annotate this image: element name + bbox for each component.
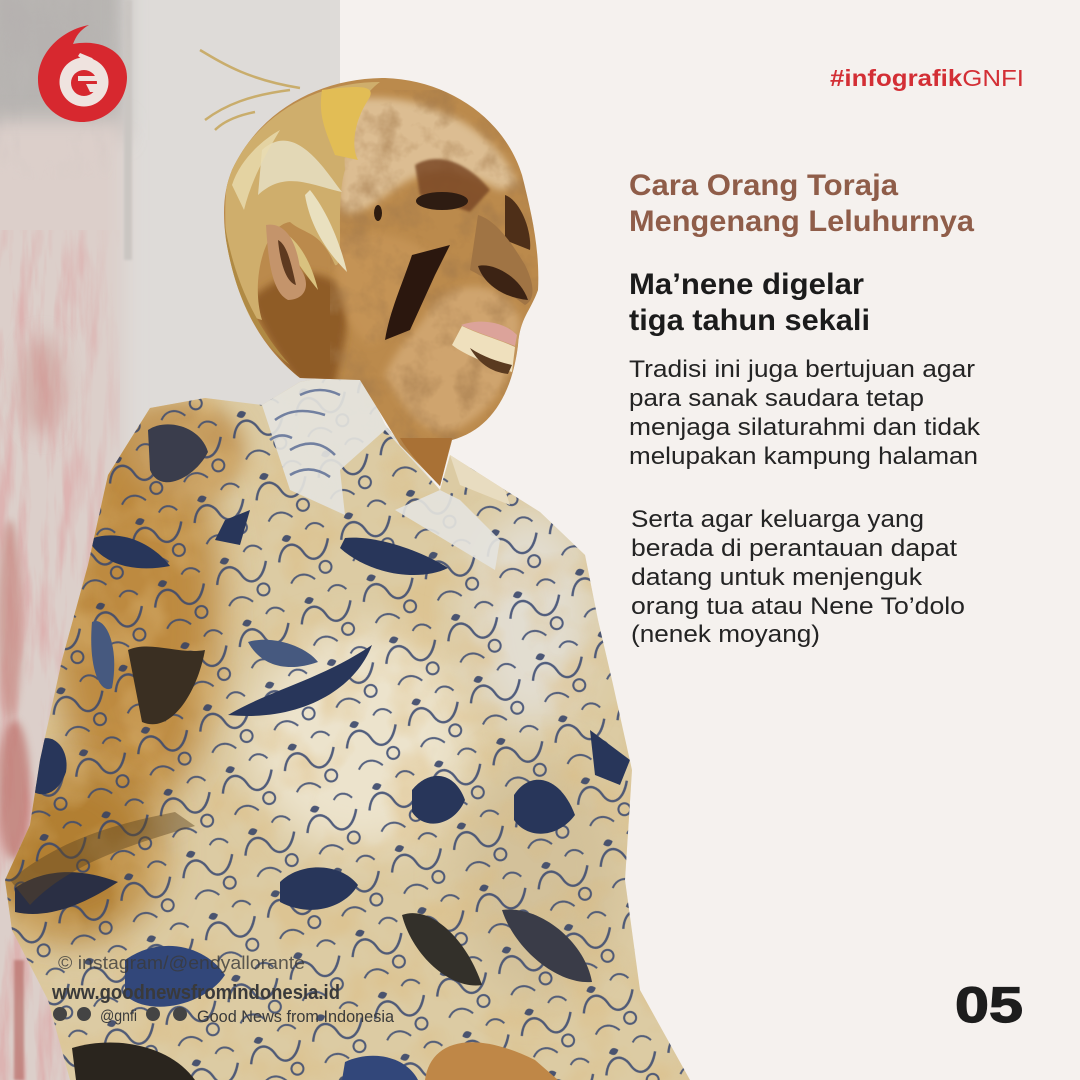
nose area (470, 215, 532, 305)
subheading: Ma’nene digelar (629, 268, 864, 301)
body paragraph 2: datang untuk menjenguk (631, 564, 923, 591)
social icons (53, 1007, 187, 1021)
cheek hole (385, 245, 450, 340)
social name: Good News from Indonesia (197, 1007, 395, 1026)
body paragraph 1: para sanak saudara tetap (629, 385, 924, 412)
body paragraph 1: melupakan kampung halaman (629, 443, 978, 470)
photo: mummy head with blond hair (200, 50, 545, 490)
stray hair strands (200, 50, 300, 130)
eye socket (415, 159, 490, 212)
photo: mummy body in batik shirt (0, 370, 700, 1080)
website: www.goodnewsfromindonesia.id (51, 982, 340, 1004)
title: Mengenang Leluhurnya (629, 205, 974, 238)
photo credit: © instagram/@endyallorante (58, 953, 305, 973)
social handle: @gnfi (100, 1008, 137, 1025)
body paragraph 2: orang tua atau Nene To’dolo (631, 593, 965, 620)
body paragraph 2: Serta agar keluarga yang (631, 506, 924, 533)
footer credits (51, 953, 395, 1026)
skull and skin (215, 70, 545, 490)
hair mass (225, 82, 380, 320)
body paragraph 2: (nenek moyang) (631, 621, 820, 648)
shirt collar (262, 370, 510, 570)
gum (461, 322, 517, 346)
subheading (629, 268, 870, 337)
body paragraph 1: menjaga silaturahmi dan tidak (629, 414, 981, 441)
body paragraph 2: berada di perantauan dapat (631, 535, 957, 562)
neck (400, 438, 452, 486)
hashtag label: #infografik GNFI (830, 65, 1024, 91)
logo: GNFI red swirl (38, 25, 127, 122)
subheading: tiga tahun sekali (629, 304, 870, 337)
teeth (452, 326, 515, 372)
sleeve crease shading (10, 812, 195, 905)
title (629, 169, 974, 238)
page number: 05 (955, 977, 1023, 1033)
body paragraph 2 (631, 506, 965, 648)
batik shirt (0, 370, 700, 1080)
body paragraph 1: Tradisi ini juga bertujuan agar (629, 356, 975, 383)
ear (266, 225, 306, 300)
logo mark: white G dragon (60, 53, 108, 106)
photo: weathered wall (0, 0, 340, 1080)
title: Cara Orang Toraja (629, 169, 898, 202)
body paragraph 1 (629, 356, 981, 470)
